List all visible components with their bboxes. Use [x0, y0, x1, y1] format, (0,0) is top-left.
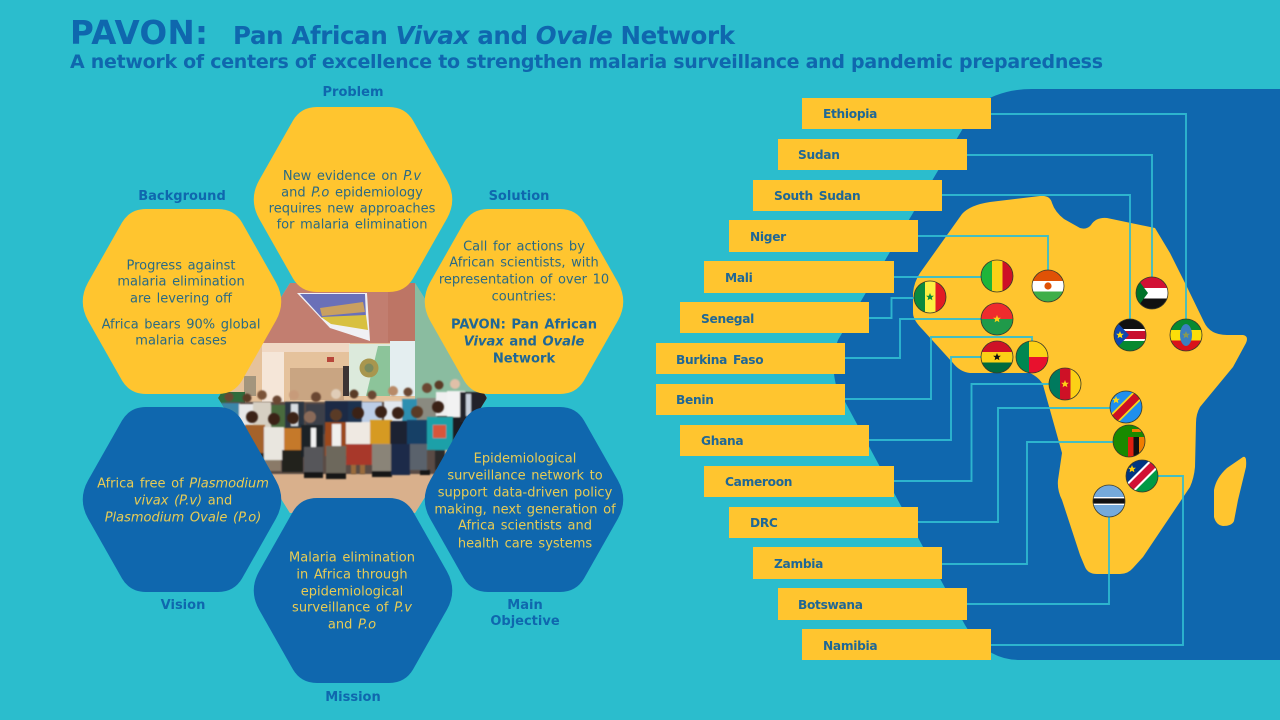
- flag: Ethiopia: [1170, 319, 1202, 352]
- country labels: Cameroon: [725, 475, 792, 489]
- section headings: Mission: [325, 690, 381, 705]
- connector lines: [845, 114, 1186, 645]
- flag: Sudan: [1136, 277, 1168, 310]
- hexagon: Vision: Plasmodium Ovale (P.o): [105, 510, 261, 526]
- hexagon: Solution: African scientists, with: [449, 256, 599, 270]
- title: Pan African Vivax and Ovale Network: [233, 21, 736, 50]
- section headings: Vision: [161, 598, 205, 613]
- flag: Botswana: [1093, 485, 1125, 517]
- hexagon: Mission: epidemiological: [301, 584, 403, 600]
- hexagon: Vision: vivax (P.v) and: [134, 494, 232, 508]
- hexagon: Solution: Vivax and Ovale: [464, 334, 584, 350]
- flag: Zambia: [1113, 425, 1145, 457]
- hexagon: Background: [83, 209, 281, 394]
- hexagon: Solution: [425, 209, 623, 394]
- hexagon: Mission: [254, 498, 452, 683]
- hexagon: Problem: [254, 107, 452, 292]
- flag: Cameroon: [1049, 368, 1082, 400]
- hexagon: Problem: for malaria elimination: [277, 218, 427, 232]
- hexagon: Solution: Call for actions by: [463, 240, 585, 254]
- hexagon: Main Objective: health care systems: [458, 536, 592, 552]
- hexagon: Background: Progress against: [126, 258, 236, 274]
- flag: Niger: [1032, 270, 1064, 302]
- subtitle: A network of centers of excellence to strengthen malaria surveillance and pandemic preparedness: [70, 51, 1103, 73]
- country labels: Niger: [750, 230, 786, 244]
- section headings: [138, 85, 560, 705]
- country labels: Ethiopia: [823, 107, 877, 121]
- photo: back row: [221, 378, 487, 442]
- hexagon: Mission: Malaria elimination: [289, 550, 415, 566]
- hexagon: Solution: Network: [493, 352, 555, 366]
- hexagon: Problem: and P.o epidemiology: [281, 186, 423, 200]
- hexagon: Background: malaria elimination: [117, 274, 245, 290]
- flag: Namibia: [1126, 460, 1158, 492]
- hexagon: Background: are levering off: [130, 292, 233, 306]
- section headings: Solution: [489, 189, 549, 204]
- map: Madagascar: [1214, 457, 1246, 526]
- hexagon: Problem: New evidence on P.v: [283, 169, 421, 184]
- section headings: Objective: [490, 614, 560, 629]
- country labels: Sudan: [798, 148, 840, 162]
- country labels: Botswana: [798, 598, 863, 612]
- hexagon: Main Objective: support data-driven policy: [438, 486, 613, 500]
- hexagon: Background: Africa bears 90% global: [102, 318, 260, 332]
- country labels: DRC: [750, 516, 778, 530]
- hexagon: Solution: representation of over 10: [439, 272, 609, 288]
- photo: crowd backing: [225, 402, 480, 474]
- map of Africa: [913, 196, 1247, 574]
- country labels: Senegal: [701, 312, 754, 326]
- hexagon: Main Objective: surveillance network to: [447, 468, 603, 484]
- country labels: Benin: [676, 393, 714, 407]
- section headings: Main: [507, 598, 543, 613]
- hexagon: Main Objective: Epidemiological: [474, 452, 576, 466]
- hexagon: Problem: requires new approaches: [269, 202, 436, 216]
- country labels: Zambia: [774, 557, 823, 571]
- hexagon: Vision: Africa free of Plasmodium: [97, 476, 269, 492]
- hexagon: Mission: in Africa through: [296, 568, 408, 582]
- hexagon: Main Objective: Africa scientists and: [458, 518, 592, 534]
- country labels: [656, 98, 991, 660]
- flag: DRC: [1110, 390, 1142, 424]
- flag: Mali: [981, 260, 1014, 292]
- country labels: Burkina Faso: [676, 353, 763, 367]
- country labels: Mali: [725, 271, 753, 285]
- hexagon: Background: malaria cases: [135, 334, 227, 348]
- hexagon: Main Objective: [425, 407, 623, 592]
- hexagon: Mission: surveillance of P.v: [292, 600, 412, 616]
- hexagon: Mission: and P.o: [328, 618, 376, 632]
- flag: Ghana: [981, 341, 1013, 374]
- flag: Benin: [1016, 341, 1048, 373]
- section headings: Problem: [322, 85, 384, 100]
- country labels: South Sudan: [774, 189, 860, 203]
- hexagon: Solution: PAVON: Pan African: [451, 318, 597, 332]
- section headings: Background: [138, 189, 226, 204]
- flag: Burkina Faso: [981, 303, 1013, 335]
- country labels: Ghana: [701, 434, 743, 448]
- title: PAVON:: [70, 14, 208, 52]
- hexagon: Main Objective: making, next generation of: [434, 502, 616, 518]
- photo: front row: [245, 401, 453, 479]
- flag: South Sudan: [1114, 319, 1146, 351]
- flag: Senegal: [914, 281, 946, 313]
- map backdrop panel: [833, 89, 1280, 660]
- title: [70, 14, 1103, 73]
- hexagon: Solution: countries:: [492, 290, 556, 304]
- country labels: Namibia: [823, 639, 877, 653]
- group photo: [215, 280, 490, 515]
- hexagon: Vision: [83, 407, 281, 592]
- banner: [297, 293, 370, 341]
